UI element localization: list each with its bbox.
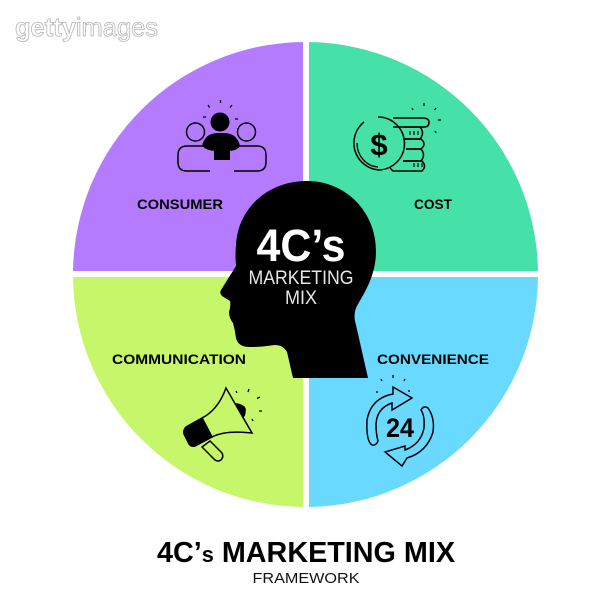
subtitle: FRAMEWORK xyxy=(252,570,360,587)
panel: communication quadrant xyxy=(73,277,303,507)
head title: 4C’s xyxy=(256,220,346,271)
icon: 24 hour arrows xyxy=(367,387,433,466)
label: convenience: CONVENIENCE xyxy=(377,351,489,367)
icon: consumer people xyxy=(178,100,266,171)
icon: number 24: 24 xyxy=(386,413,414,443)
title: 4C’s MARKETING MIX xyxy=(157,537,456,569)
icon: megaphone xyxy=(184,388,262,461)
icon: dollar sign: $ xyxy=(370,127,388,162)
label: communication: COMMUNICATION xyxy=(112,351,246,367)
panel: consumer quadrant xyxy=(73,42,303,271)
label: consumer: CONSUMER xyxy=(137,196,223,212)
panel: convenience quadrant xyxy=(309,277,538,507)
head title xyxy=(248,220,354,309)
head silhouette xyxy=(220,181,376,378)
head title: MARKETING xyxy=(248,268,354,289)
panel: cost quadrant xyxy=(309,42,538,271)
watermark: gettyimages xyxy=(15,12,158,42)
head title: MIX xyxy=(285,288,317,309)
label: cost: COST xyxy=(414,196,452,212)
icon: cost coins xyxy=(354,103,441,171)
sparkle marks xyxy=(376,375,410,392)
